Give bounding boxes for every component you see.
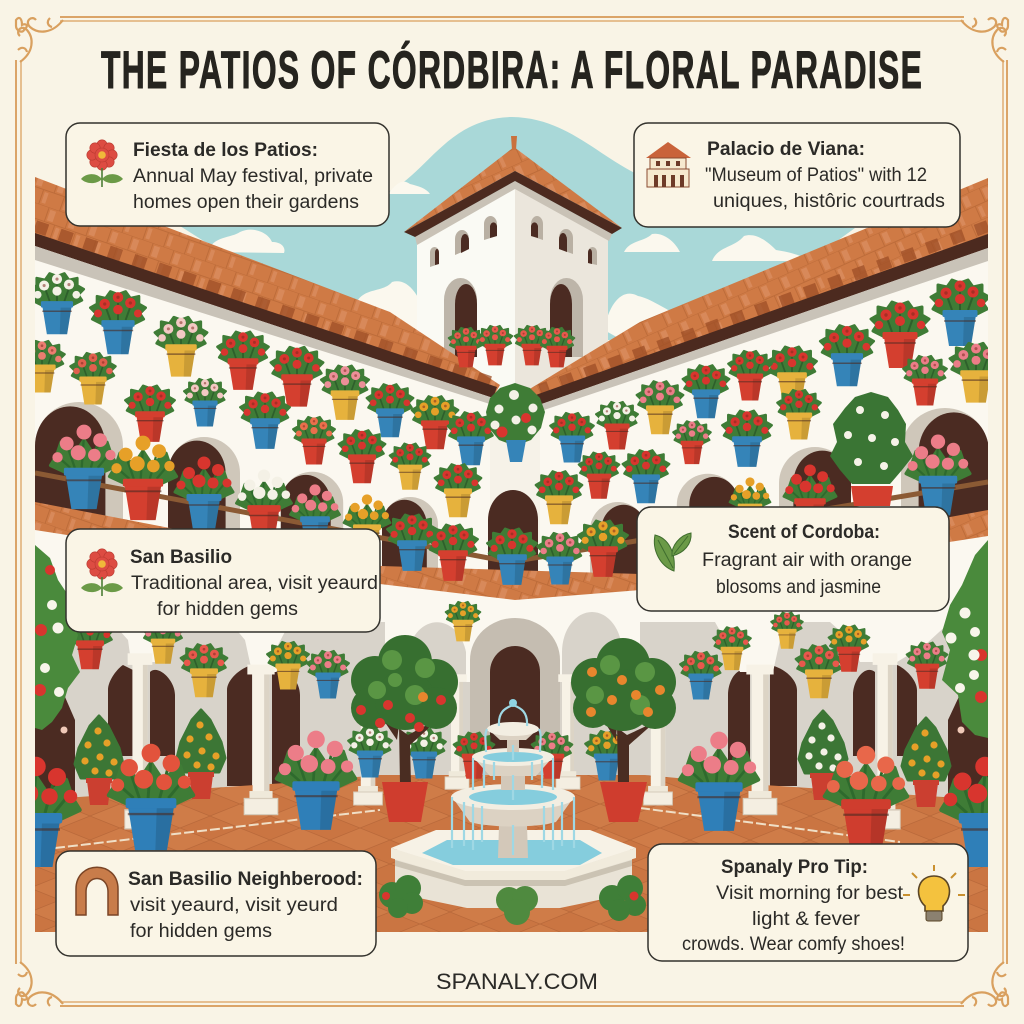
icon: palace building	[646, 142, 691, 187]
upper arches	[35, 402, 989, 585]
panel: Palacio de Viana: Palacio de Viana:	[707, 139, 865, 160]
fountain	[391, 699, 636, 908]
lower doors	[35, 665, 988, 800]
icon: light bulb	[903, 865, 965, 921]
icon: brown arch	[76, 867, 118, 915]
panel: San Basilio Neighberood	[56, 851, 376, 956]
lower gallery wall	[65, 622, 958, 797]
panel: Fiesta de los Patios: homes open their gardens	[133, 192, 359, 213]
left roof	[35, 177, 500, 397]
sky	[180, 117, 855, 340]
wall-hung flower pots	[19, 274, 1002, 585]
panel: Scent of Cordoba: Scent of Cordoba:	[728, 522, 880, 543]
panel: Spanaly Pro Tip: crowds. Wear comfy shoes!	[682, 934, 905, 955]
shrubs	[379, 875, 646, 925]
left climbing vine	[34, 545, 80, 734]
icon: red flower	[81, 140, 123, 187]
central tile band	[380, 566, 640, 600]
orange tree	[571, 638, 676, 822]
courtyard illustration	[0, 117, 1024, 932]
central bouquet over arch	[486, 383, 545, 462]
gallery hanging pots	[67, 602, 947, 699]
panel: Spanaly Pro Tip: Visit morning for best	[716, 883, 904, 904]
right roof	[528, 178, 988, 406]
panel: Spanaly Pro Tip: light & fever	[752, 909, 861, 930]
footer website: SPANALY.COM	[436, 969, 598, 994]
central arches and door	[414, 612, 620, 775]
balcony rails	[35, 473, 988, 562]
floor plants behind	[75, 710, 950, 807]
panel: Fiesta de los Patios: Annual May festival, private	[133, 166, 373, 187]
columns	[125, 653, 900, 829]
panel: San Basilio Neighberood: for hidden gems	[130, 921, 272, 942]
terracotta floor	[35, 775, 988, 932]
white gallery arcade	[35, 590, 988, 682]
white walls	[35, 260, 988, 590]
panel: Palacio de Viana: "Museum of Patios" with 12	[705, 165, 927, 186]
bell tower	[404, 136, 622, 395]
panel: Scent of Cordoba: Fragrant air with orange	[702, 550, 912, 571]
panel: Fiesta de los Patios	[66, 123, 389, 226]
large floor pots	[0, 731, 1024, 867]
panel: San Basilio Neighberood: visit yeaurd, visit yeurd	[130, 895, 338, 916]
panel: San Basilio Neighberood: San Basilio Neighberood:	[128, 869, 363, 890]
panel: Spanaly Pro Tip	[648, 844, 968, 961]
jasmine shrub in red pot	[830, 392, 913, 506]
panel: Scent of Cordoba	[637, 507, 949, 611]
right climbing vine	[942, 540, 988, 738]
panel: Scent of Cordoba: blosoms and jasmine	[716, 577, 881, 598]
panel: San Basilio: for hidden gems	[157, 599, 298, 620]
red fruit tree	[351, 635, 458, 822]
clouds	[208, 182, 808, 350]
panel: San Basilio: Traditional area, visit yeaurd	[131, 573, 378, 594]
panel: San Basilio	[66, 529, 380, 632]
panel: Spanaly Pro Tip: Spanaly Pro Tip:	[721, 857, 868, 878]
title: THE PATIOS OF CÓRDBIRA: A FLORAL PARADISE	[101, 39, 922, 100]
icon: pink flower	[81, 549, 123, 596]
icon: green leaves	[654, 533, 691, 571]
panel: San Basilio: San Basilio	[130, 547, 232, 568]
panel: Palacio de Viana	[634, 123, 960, 227]
panel: Fiesta de los Patios: Fiesta de los Patios:	[133, 140, 318, 161]
panel: Palacio de Viana: uniques, histôric courtrads	[713, 191, 945, 212]
water streams	[452, 705, 574, 855]
